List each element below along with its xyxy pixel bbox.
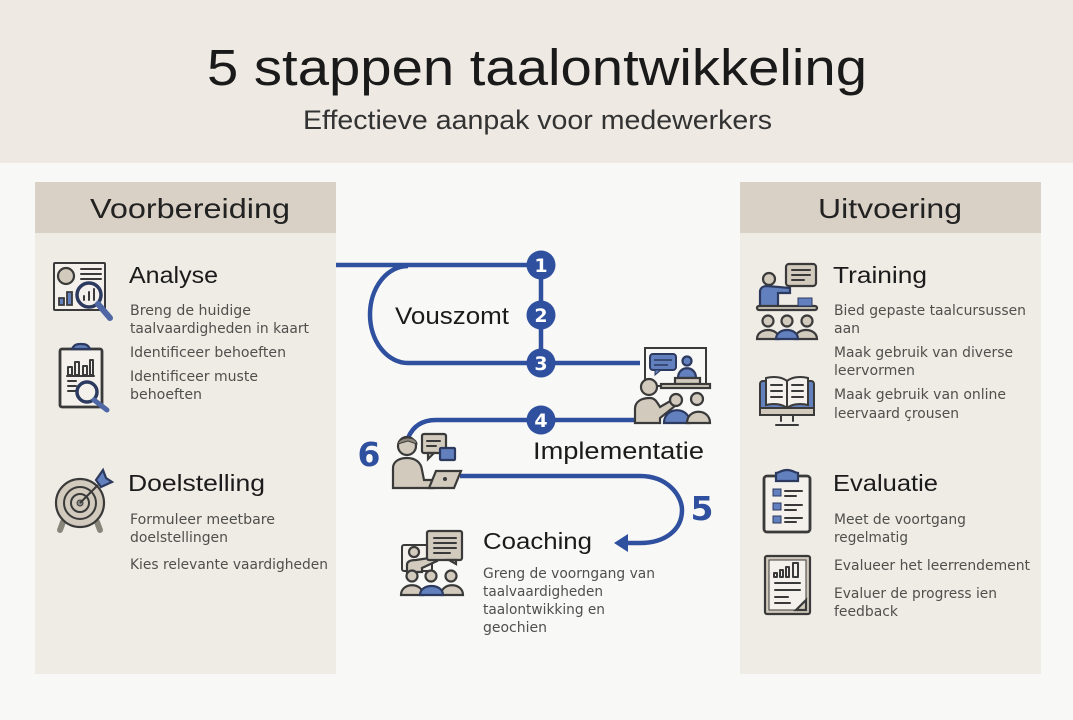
icon: trainer and group — [757, 264, 817, 339]
section: Training: leervaard çrousen — [834, 406, 959, 422]
step 4 — [526, 406, 556, 434]
panel: Uitvoering: Uitvoering — [818, 193, 962, 224]
header band — [0, 0, 1073, 163]
section: Doelstelling: doelstellingen — [130, 530, 228, 546]
icon: report with chart — [765, 556, 810, 614]
step 2 — [526, 300, 556, 330]
icon: video presenter — [635, 348, 710, 423]
section: Coaching — [483, 528, 655, 636]
step 3: 3 — [534, 353, 548, 375]
section: Analyse: behoeften — [130, 387, 202, 403]
section: Training: Maak gebruik van diverse — [834, 345, 1013, 361]
section: Evaluatie: Evaluer de progress ien — [834, 586, 997, 602]
section: Doelstelling — [128, 470, 328, 573]
step 1: 1 — [534, 255, 548, 277]
section: Evaluatie: Evalueer het leerrendement — [834, 558, 1030, 574]
section: Training: Training — [833, 262, 927, 288]
panel: Voorbereiding: Voorbereiding — [90, 193, 290, 224]
section: Analyse: Breng de huidige — [130, 303, 251, 319]
label: Vouszomt: Vouszomt — [395, 303, 509, 330]
section: Coaching: Coaching — [483, 528, 592, 554]
section: Analyse — [129, 262, 309, 403]
panel: Voorbereiding — [35, 182, 336, 674]
panel: Uitvoering — [740, 182, 1041, 674]
section: Training: Maak gebruik van online — [834, 387, 1006, 403]
icon: checklist clipboard — [764, 470, 810, 532]
label: Implementatie: Implementatie — [533, 438, 704, 465]
section: Analyse: Analyse — [129, 262, 218, 288]
section: Evaluatie — [833, 470, 1030, 620]
icon: analyse report — [54, 263, 110, 318]
section: Doelstelling: Doelstelling — [128, 470, 265, 496]
icon: clipboard chart — [60, 344, 107, 410]
section: Evaluatie: regelmatig — [834, 530, 908, 546]
icon: coaching group — [401, 531, 463, 595]
step 6: 6 — [358, 435, 380, 474]
icon: target — [56, 470, 112, 530]
step 2: 2 — [534, 305, 548, 327]
process path — [336, 265, 682, 552]
icon: person with laptop — [393, 434, 461, 488]
step 1 — [526, 250, 556, 280]
section: Coaching: geochien — [483, 620, 547, 636]
section: Training: leervormen — [834, 363, 915, 379]
step 3 — [526, 348, 556, 378]
section: Doelstelling: Kies relevante vaardigheden — [130, 557, 328, 573]
section: Analyse: Identificeer behoeften — [130, 345, 286, 361]
step 4: 4 — [534, 410, 548, 432]
section: Evaluatie: feedback — [834, 604, 899, 620]
section: Training: Bied gepaste taalcursussen — [834, 303, 1026, 319]
title: 5 stappen taalontwikkeling — [207, 39, 867, 96]
section: Coaching: Greng de voorngang van — [483, 566, 655, 582]
section: Doelstelling: Formuleer meetbare — [130, 512, 275, 528]
step 5: 5 — [691, 489, 713, 528]
icon: online book — [760, 377, 814, 425]
section: Training: aan — [834, 321, 860, 337]
section: Analyse: Identificeer muste — [130, 369, 258, 385]
section: Training — [833, 262, 1026, 422]
section: Coaching: taalvaardigheden — [483, 584, 603, 600]
section: Evaluatie: Evaluatie — [833, 470, 938, 496]
section: Evaluatie: Meet de voortgang — [834, 512, 966, 528]
subtitle: Effectieve aanpak voor medewerkers — [303, 105, 772, 135]
section: Analyse: taalvaardigheden in kaart — [130, 321, 309, 337]
section: Coaching: taalontwikking en — [483, 602, 605, 618]
